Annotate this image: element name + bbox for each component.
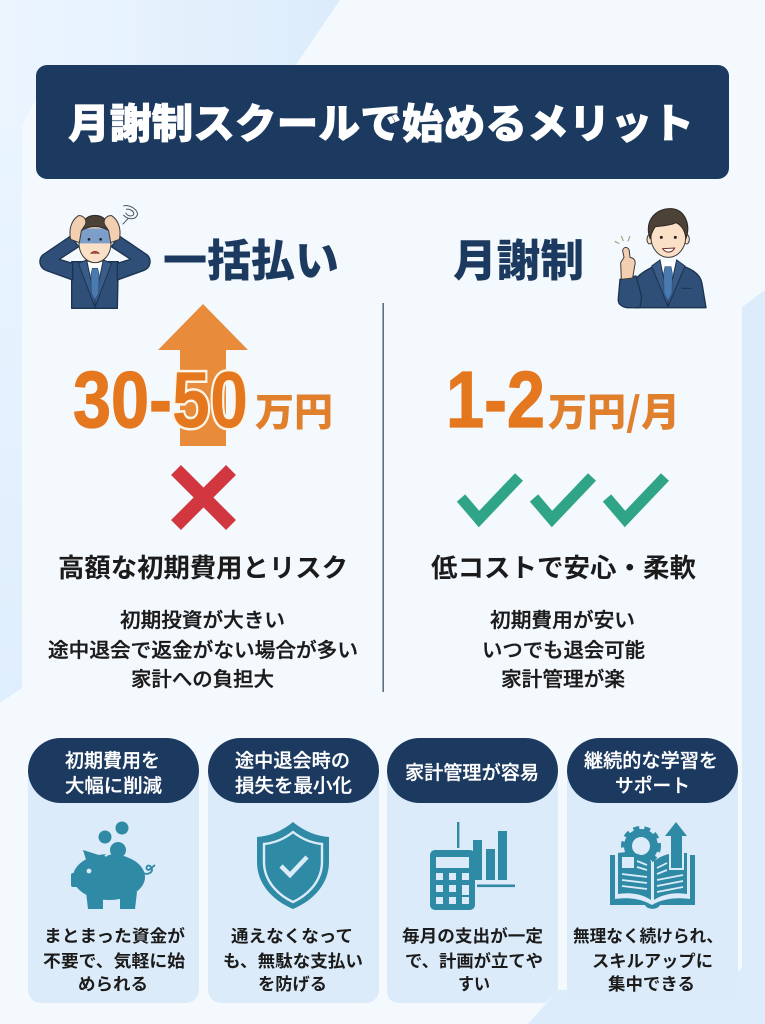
card 2 description: を防げる bbox=[258, 975, 327, 994]
card 2 heading bbox=[208, 738, 379, 803]
card 3 description bbox=[402, 926, 543, 994]
card 4 description: スキルアップに bbox=[592, 952, 713, 971]
card 2 description bbox=[223, 927, 363, 994]
card 1 heading: 初期費用を bbox=[65, 746, 160, 773]
card 2 description: も、無駄な支払い bbox=[223, 951, 363, 971]
text block: lump-sum drawbacks: 初期投資が大きい bbox=[120, 609, 285, 632]
title banner: 月謝制スクールで始めるメリット bbox=[68, 90, 694, 150]
card 3 description: で、計画が立てや bbox=[405, 951, 543, 971]
text block: monthly benefits bbox=[482, 609, 645, 691]
card 4 description: 無理なく続けられ、 bbox=[573, 927, 723, 946]
card 4 heading bbox=[567, 738, 738, 803]
icon: orange up arrow bbox=[158, 304, 248, 446]
price: 1-2 per month bbox=[446, 355, 680, 444]
icon: book gear and arrow bbox=[610, 822, 695, 909]
icon: calculator and bars bbox=[430, 822, 515, 910]
panel: card 3 easy budgeting bbox=[387, 738, 558, 1003]
text block: lump-sum drawbacks: 途中退会で返金がない場合が多い bbox=[48, 639, 358, 662]
card 1 description bbox=[43, 926, 185, 994]
panel: card 2 minimize loss bbox=[208, 738, 379, 1003]
icon: three green checks bbox=[461, 477, 665, 519]
subheading: low cost and flexible: 低コストで安心・柔軟 bbox=[431, 548, 696, 585]
card 1 description: まとまった資金が bbox=[44, 926, 185, 946]
price: 30-50: 万円 bbox=[255, 382, 333, 438]
text block: lump-sum drawbacks: 家計への負担大 bbox=[131, 668, 274, 691]
card 1 heading: 大幅に削減 bbox=[65, 771, 162, 798]
panel: card 4 continuous learning bbox=[567, 738, 738, 1003]
card 3 description: すい bbox=[458, 975, 490, 994]
icon: piggy bank bbox=[71, 822, 155, 909]
icon: red cross bbox=[176, 470, 231, 525]
card 2 heading: 損失を最小化 bbox=[235, 771, 352, 798]
icon: smiling businessman thumbs up bbox=[615, 209, 706, 308]
price: 1-2 per month: 万円/月 bbox=[548, 382, 680, 438]
card 4 heading: 継続的な学習を bbox=[584, 746, 718, 773]
card 4 description bbox=[573, 927, 723, 994]
card 1 description: められる bbox=[78, 975, 148, 994]
text block: monthly benefits: いつでも退会可能 bbox=[482, 639, 645, 662]
text block: monthly benefits: 初期費用が安い bbox=[490, 609, 635, 632]
icon: stressed businessman bbox=[40, 206, 150, 308]
card 3 description: 毎月の支出が一定 bbox=[402, 926, 543, 946]
price: 1-2 per month: 1-2 bbox=[446, 355, 545, 444]
card 2 description: 通えなくなって bbox=[231, 927, 353, 946]
divider bbox=[382, 303, 384, 692]
card 3 heading: 家計管理が容易 bbox=[405, 758, 539, 785]
icon: shield with check bbox=[257, 822, 329, 909]
card 4 description: 集中できる bbox=[608, 975, 695, 994]
heading: lump-sum payment: 一括払い bbox=[163, 225, 339, 289]
text block: monthly benefits: 家計管理が楽 bbox=[501, 668, 625, 691]
text block: lump-sum drawbacks bbox=[48, 609, 358, 691]
heading: monthly plan: 月謝制 bbox=[453, 225, 584, 289]
title banner bbox=[36, 65, 729, 179]
card 1 heading bbox=[28, 738, 199, 803]
card 2 heading: 途中退会時の bbox=[235, 746, 350, 773]
card 3 heading bbox=[387, 738, 558, 803]
panel: lump-sum price bbox=[73, 304, 333, 446]
price: 30-50: 30-50 bbox=[73, 355, 248, 444]
card 1 description: 不要で、気軽に始 bbox=[43, 952, 185, 971]
card 4 heading: サポート bbox=[615, 771, 690, 798]
panel: card 1 reduce initial cost bbox=[28, 738, 199, 1003]
subheading: high initial cost and risk: 高額な初期費用とリスク bbox=[58, 548, 348, 585]
